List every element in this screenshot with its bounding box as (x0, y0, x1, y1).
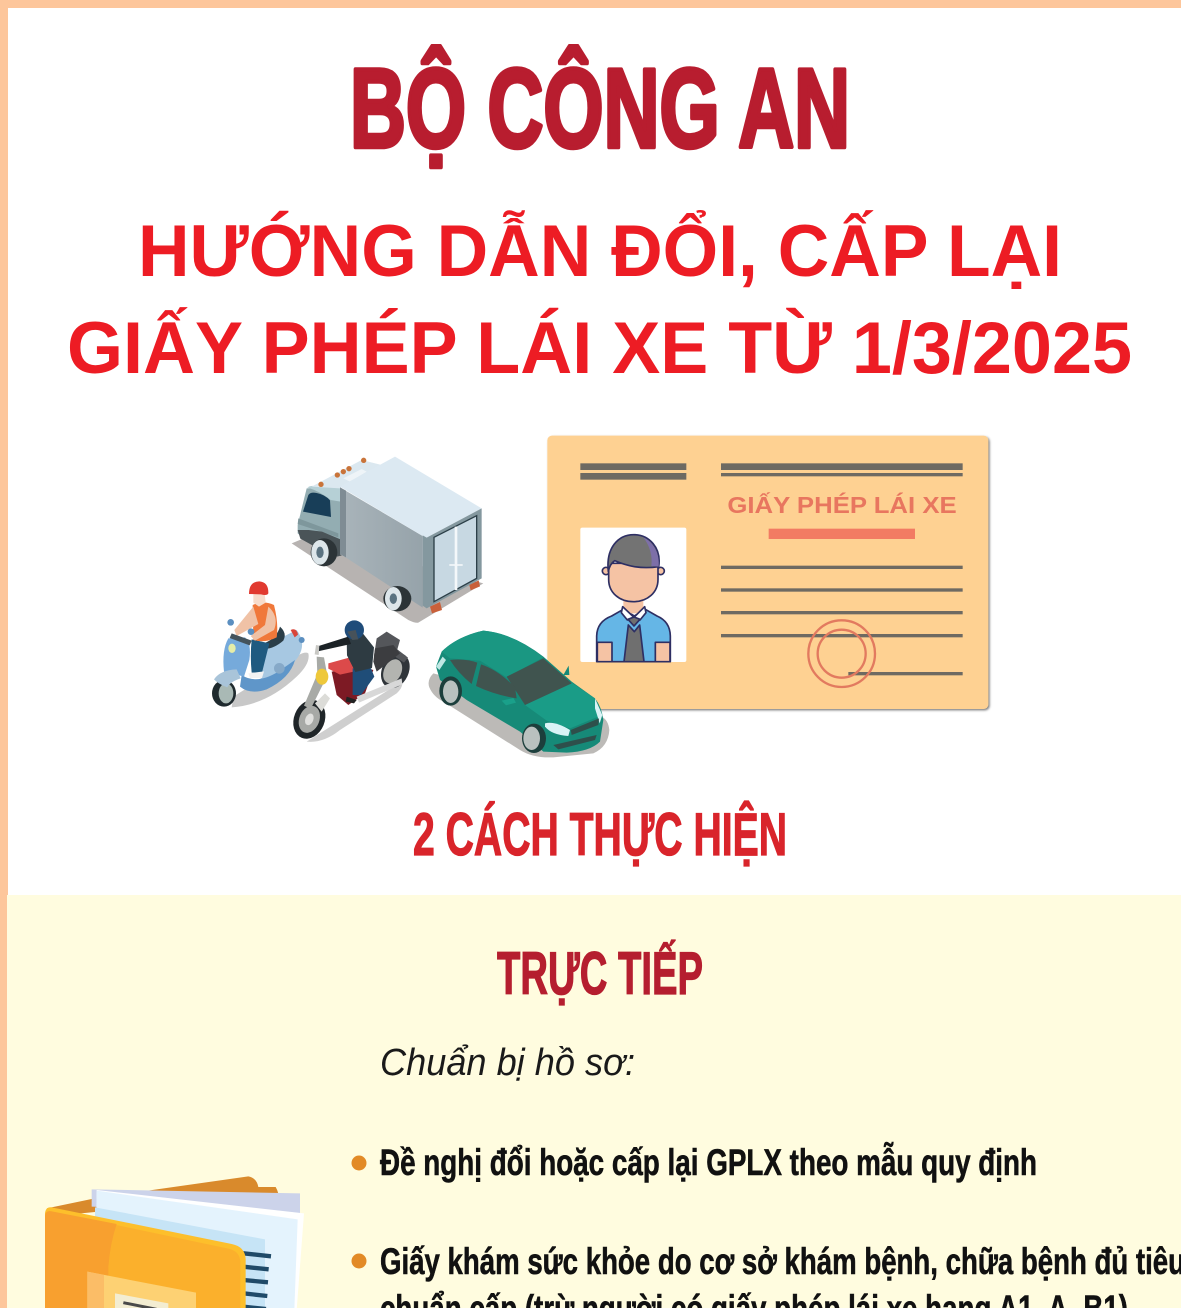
truck cab (298, 487, 340, 555)
bullet: health certificate (352, 1241, 1181, 1308)
text: prepare documents: Chuẩn bị hồ sơ: (380, 1042, 635, 1084)
icon: document folder (45, 1176, 304, 1308)
icon: truck (292, 457, 483, 623)
heading: guidance title (67, 211, 1132, 389)
panel: direct method background (7, 895, 1181, 1308)
icon: scooter rider (212, 581, 309, 707)
stamp (808, 620, 875, 687)
heading: two ways: 2 CÁCH THỰC HIỆN (413, 801, 787, 868)
heading: guidance title: HƯỚNG DẪN ĐỔI, CẤP LẠI (138, 211, 1062, 292)
truck box (340, 487, 423, 608)
icon: driving licence card (547, 436, 988, 709)
title: Bộ Công an: BỘ CÔNG AN (350, 46, 850, 171)
card title: GIẤY PHÉP LÁI XE (727, 492, 957, 518)
portrait photo (580, 528, 686, 662)
icon: green car (429, 631, 609, 757)
heading: guidance title: GIẤY PHÉP LÁI XE TỪ 1/3/2025 (67, 308, 1132, 389)
heading: in person: TRỰC TIẾP (497, 940, 703, 1007)
icon: motorcycle rider (288, 620, 415, 744)
car body (436, 631, 603, 753)
